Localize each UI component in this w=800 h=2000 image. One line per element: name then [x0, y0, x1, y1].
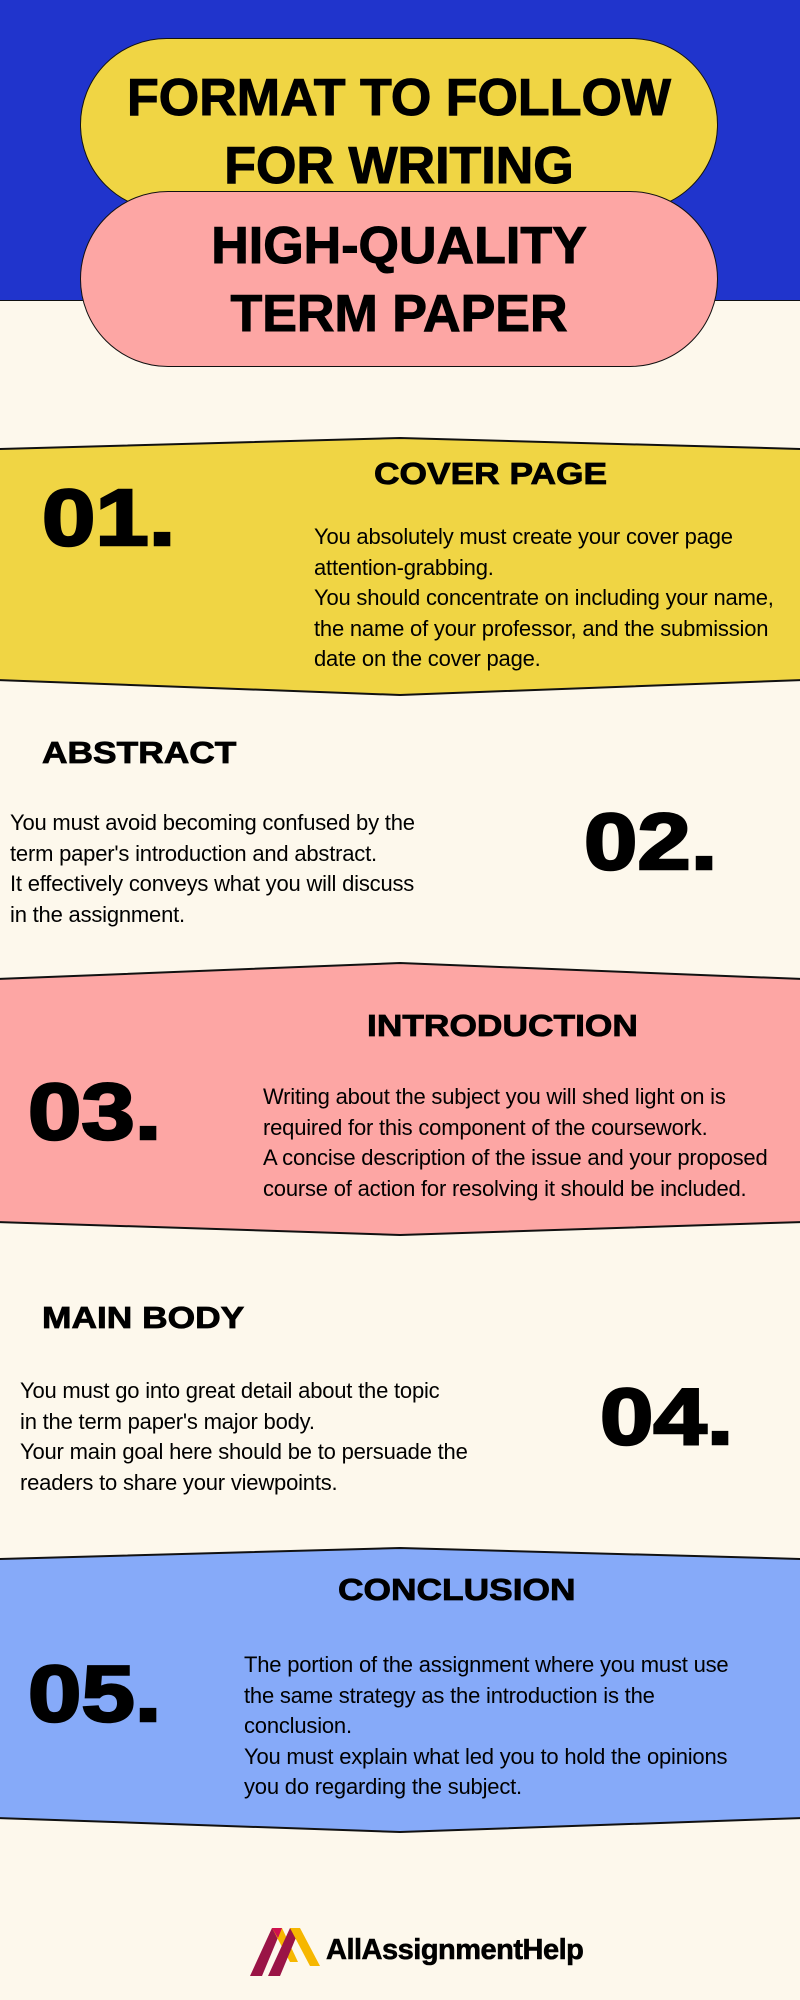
- number 04: 04.: [600, 1372, 733, 1461]
- conclusion text: conclusion.: [244, 1713, 352, 1738]
- logo text: AllAssignmentHelp: [326, 1934, 583, 1966]
- number 05: 05.: [28, 1649, 161, 1738]
- section 04: main body: [20, 1300, 733, 1494]
- title pill: top: FOR WRITING: [224, 137, 574, 195]
- introduction text: Writing about the subject you will shed light on is: [263, 1084, 726, 1109]
- main body text: Your main goal here should be to persuade the: [20, 1439, 468, 1464]
- icon: logo mark: [250, 1928, 320, 1976]
- title pill: bottom: TERM PAPER: [230, 285, 568, 343]
- abstract text: [10, 810, 415, 926]
- logo: [250, 1928, 583, 1976]
- conclusion text: The portion of the assignment where you must use: [244, 1652, 728, 1677]
- heading cover page: COVER PAGE: [374, 456, 607, 491]
- section 01: cover page: [42, 456, 774, 671]
- introduction text: A concise description of the issue and your proposed: [263, 1145, 767, 1170]
- main body text: You must go into great detail about the topic: [20, 1378, 440, 1403]
- number 01: 01.: [42, 473, 175, 562]
- section 03: introduction: [28, 1008, 767, 1200]
- section 02: abstract: [10, 735, 717, 926]
- title pill: top: [80, 38, 718, 211]
- introduction text: course of action for resolving it should be included.: [263, 1176, 746, 1200]
- abstract text: term paper's introduction and abstract.: [10, 840, 377, 866]
- heading conclusion: CONCLUSION: [338, 1572, 576, 1607]
- abstract text: in the assignment.: [10, 902, 185, 926]
- section 05: conclusion: [28, 1572, 728, 1799]
- cover page text: [314, 524, 774, 671]
- conclusion text: you do regarding the subject.: [244, 1774, 522, 1799]
- heading abstract: ABSTRACT: [42, 735, 236, 770]
- cover page text: You absolutely must create your cover page: [314, 524, 733, 549]
- abstract text: You must avoid becoming confused by the: [10, 810, 415, 835]
- header background: [0, 0, 800, 301]
- number 03: 03.: [28, 1067, 161, 1156]
- title pill: bottom: [80, 191, 718, 367]
- introduction text: required for this component of the coursework.: [263, 1114, 707, 1140]
- main body text: in the term paper's major body.: [20, 1408, 315, 1434]
- heading main body: MAIN BODY: [42, 1300, 244, 1335]
- main body text: [20, 1378, 468, 1494]
- abstract text: It effectively conveys what you will discuss: [10, 871, 414, 896]
- cover page text: attention-grabbing.: [314, 554, 494, 580]
- conclusion text: You must explain what led you to hold the opinions: [244, 1744, 727, 1768]
- title pill: top: FORMAT TO FOLLOW: [127, 69, 671, 127]
- number 02: 02.: [584, 797, 717, 886]
- cover page text: date on the cover page.: [314, 646, 541, 671]
- conclusion text: the same strategy as the introduction is the: [244, 1682, 655, 1708]
- heading introduction: INTRODUCTION: [367, 1008, 638, 1043]
- conclusion text: [244, 1652, 728, 1799]
- title pill: bottom: HIGH-QUALITY: [211, 217, 587, 275]
- cover page text: the name of your professor, and the submission: [314, 616, 768, 640]
- main body text: readers to share your viewpoints.: [20, 1470, 337, 1494]
- introduction text: [263, 1084, 767, 1200]
- cover page text: You should concentrate on including your name,: [314, 585, 774, 610]
